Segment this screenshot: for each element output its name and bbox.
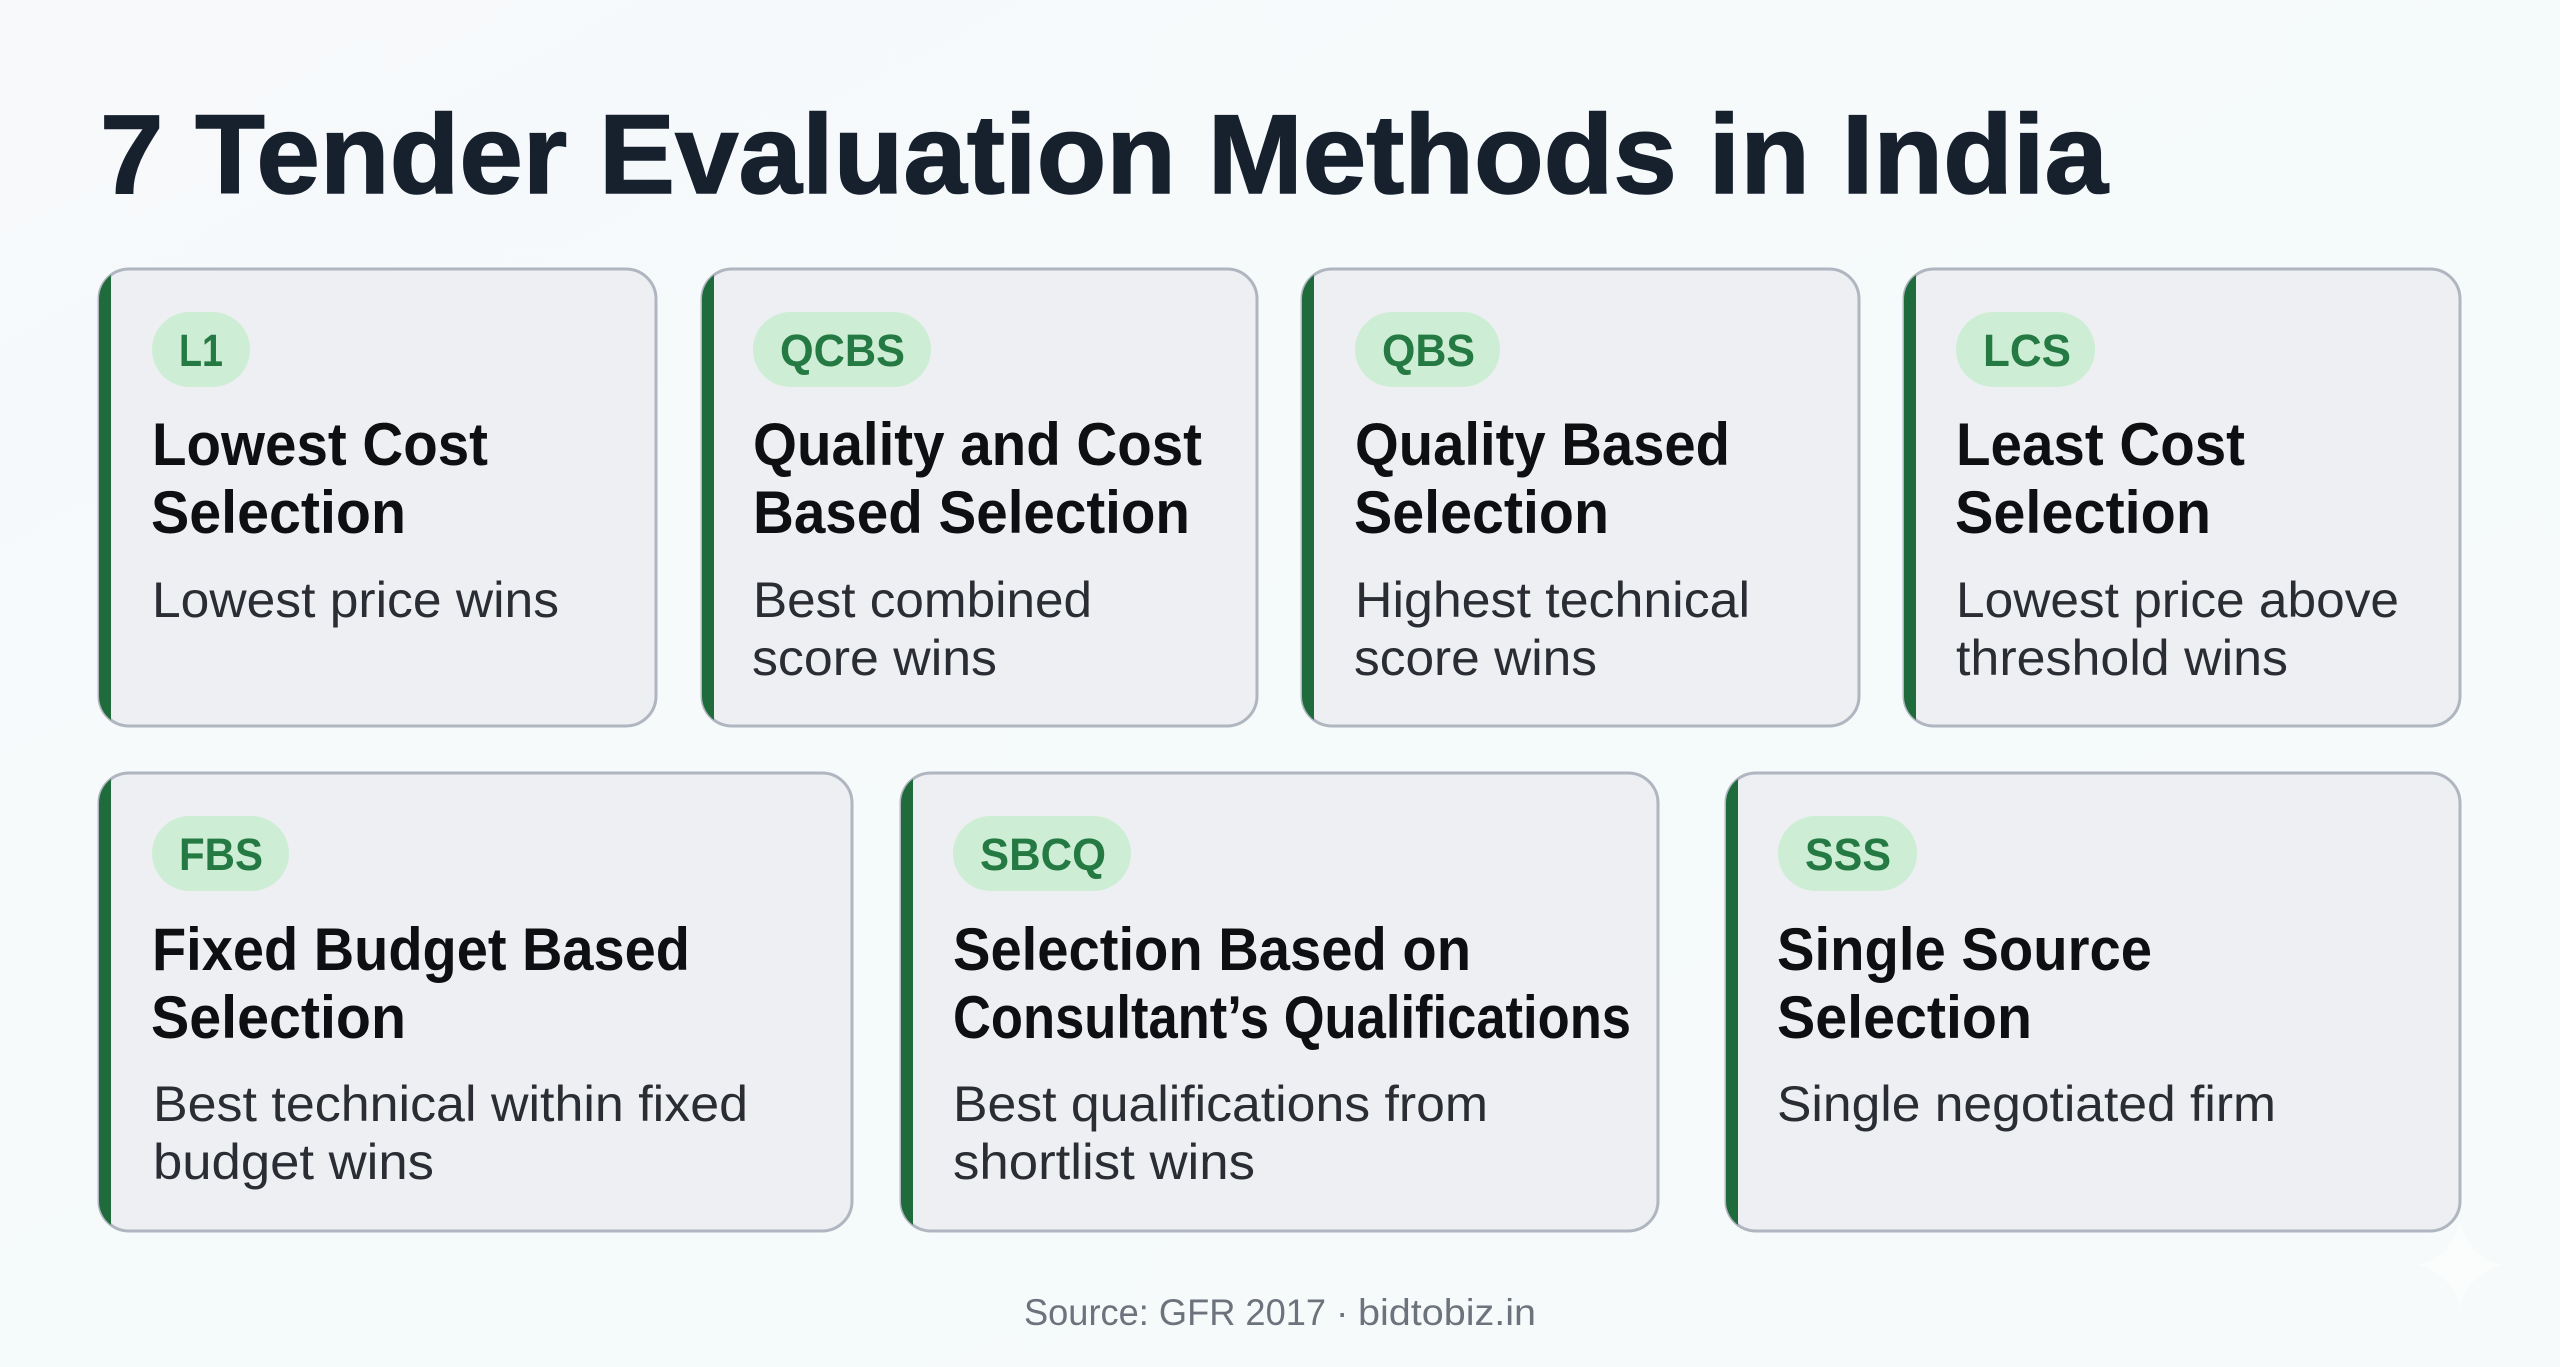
badge: QBS	[1355, 312, 1500, 387]
heading: Lowest Cost Selection	[151, 411, 488, 546]
heading: Single Source Selection: Single Source	[1777, 916, 2152, 983]
description: Best technical within fixed budget wins: budget wins	[153, 1134, 434, 1190]
description: Single negotiated firm: Single negotiated firm	[1777, 1076, 2276, 1132]
description: Lowest price above threshold wins	[1956, 572, 2399, 686]
heading: Quality Based Selection: Quality Based	[1355, 411, 1730, 478]
description: Best combined score wins: score wins	[752, 630, 997, 686]
badge: QCBS	[753, 312, 931, 387]
description: Best qualifications from shortlist wins: Best qualifications from	[953, 1076, 1488, 1132]
source footer	[1024, 1292, 1536, 1333]
heading: Quality and Cost Based Selection	[753, 411, 1202, 546]
heading: Least Cost Selection	[1955, 411, 2245, 546]
description: Best qualifications from shortlist wins: shortlist wins	[953, 1134, 1255, 1190]
badge: L1: L1	[179, 325, 223, 376]
badge: FBS: FBS	[179, 829, 263, 880]
panel: QCBS Quality and Cost Based Selection	[702, 269, 1257, 726]
heading: Quality Based Selection	[1354, 411, 1730, 546]
source footer: bidtobiz.in	[1358, 1292, 1536, 1333]
heading: Fixed Budget Based Selection: Selection	[151, 984, 406, 1051]
description: Highest technical score wins	[1354, 572, 1750, 686]
heading: Quality and Cost Based Selection: Quality and Cost	[753, 411, 1202, 478]
icon: faint sparkle	[2416, 1222, 2504, 1308]
heading: Fixed Budget Based Selection: Fixed Budget Based	[152, 916, 690, 983]
heading: Least Cost Selection: Least Cost	[1956, 411, 2245, 478]
panel: LCS Least Cost Selection	[1904, 269, 2460, 726]
badge: FBS	[152, 816, 289, 891]
badge: LCS	[1956, 312, 2095, 387]
panel: SBCQ Selection Based on Consultant's Qualifications	[901, 773, 1658, 1231]
description: Best technical within fixed budget wins: Best technical within fixed	[153, 1076, 748, 1132]
description: Highest technical score wins: score wins	[1354, 630, 1597, 686]
panel: L1 Lowest Cost Selection	[99, 269, 656, 726]
description: Highest technical score wins: Highest technical	[1355, 572, 1750, 628]
badge: QBS: QBS	[1382, 325, 1475, 376]
panel: QBS Quality Based Selection	[1302, 269, 1859, 726]
heading: Least Cost Selection: Selection	[1955, 479, 2211, 546]
panel: SSS Single Source Selection	[1726, 773, 2460, 1231]
title: 7 Tender Evaluation Methods in India	[100, 92, 2109, 217]
description: Best combined score wins	[752, 572, 1092, 686]
source footer: ·	[1336, 1292, 1348, 1333]
heading: Fixed Budget Based Selection	[151, 916, 690, 1051]
source footer: Source: GFR 2017	[1024, 1292, 1326, 1333]
description: Best combined score wins: Best combined	[753, 572, 1092, 628]
description: Lowest price above threshold wins: Lowest price above	[1956, 572, 2399, 628]
description: Best technical within fixed budget wins	[153, 1076, 748, 1190]
badge: L1	[152, 312, 250, 387]
badge: QCBS: QCBS	[780, 325, 905, 376]
heading: Lowest Cost Selection: Selection	[151, 479, 406, 546]
heading: Quality and Cost Based Selection: Based Selection	[753, 479, 1190, 546]
heading: Quality Based Selection: Selection	[1354, 479, 1609, 546]
badge: SSS: SSS	[1805, 829, 1891, 880]
description: Best qualifications from shortlist wins	[953, 1076, 1488, 1190]
heading: Single Source Selection	[1777, 916, 2152, 1051]
badge: SBCQ: SBCQ	[980, 829, 1106, 880]
description: Lowest price wins: Lowest price wins	[152, 572, 559, 628]
heading: Selection Based on Consultant's Qualifications: Consultant’s Qualifications	[953, 984, 1631, 1051]
panel: FBS Fixed Budget Based Selection	[99, 773, 852, 1231]
badge: LCS: LCS	[1983, 325, 2071, 376]
heading: Lowest Cost Selection: Lowest Cost	[152, 411, 488, 478]
badge: SSS	[1778, 816, 1917, 891]
heading: Selection Based on Consultant's Qualifications	[953, 916, 1631, 1051]
heading: Single Source Selection: Selection	[1777, 984, 2032, 1051]
heading: Selection Based on Consultant's Qualifications: Selection Based on	[953, 916, 1471, 983]
description: Lowest price above threshold wins: threshold wins	[1956, 630, 2288, 686]
badge: SBCQ	[953, 816, 1131, 891]
